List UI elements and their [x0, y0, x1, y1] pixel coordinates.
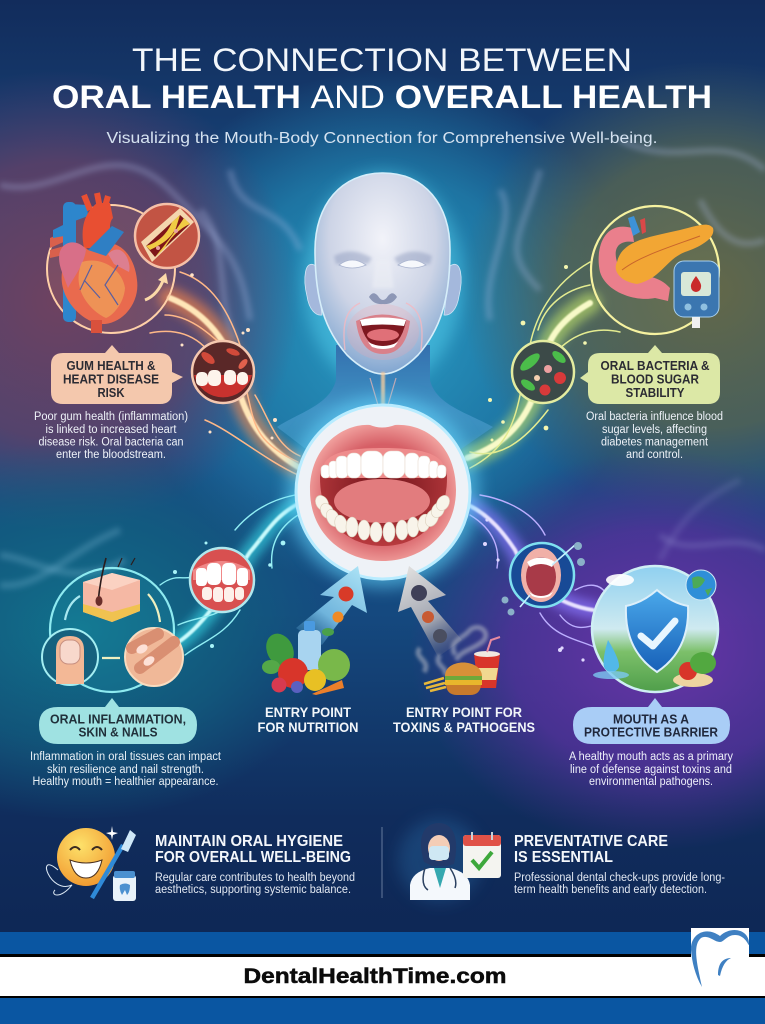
hygiene text: aesthetics, supporting systemic balance.	[155, 884, 351, 896]
tongue	[334, 479, 430, 523]
icon: globe	[686, 570, 716, 600]
nutrition label: FOR NUTRITION	[258, 720, 358, 735]
icon: food and water	[261, 621, 350, 695]
sugar description: diabetes management	[601, 436, 709, 448]
glowing energy streams	[150, 262, 620, 662]
panel: blood sugar	[512, 206, 723, 461]
sugar description: and control.	[626, 449, 683, 461]
nutrition label	[258, 705, 358, 735]
sugar bubble: STABILITY	[626, 386, 685, 400]
title	[52, 42, 712, 115]
central head figure	[277, 172, 493, 460]
preventative text: term health benefits and early detection.	[514, 884, 707, 896]
panel: heart disease	[34, 193, 254, 461]
panel: skin and nails	[30, 548, 254, 788]
hygiene text: MAINTAIN ORAL HYGIENE	[155, 833, 343, 850]
heart description: Poor gum health (inflammation)	[34, 411, 188, 423]
icon: tooth logo	[691, 928, 749, 987]
title: ORAL HEALTH AND OVERALL HEALTH	[52, 79, 712, 115]
icon: pancreas	[599, 216, 713, 301]
toxins label: ENTRY POINT FOR	[406, 705, 522, 720]
icon: heart	[50, 193, 168, 333]
icon: smoke	[418, 627, 486, 675]
footer band	[0, 928, 765, 1024]
sugar description	[586, 411, 723, 461]
icon: open mouth circle	[502, 542, 585, 616]
small mouth	[344, 303, 422, 360]
icon: glucose meter	[674, 261, 719, 328]
skin description: skin resilience and nail strength.	[47, 764, 204, 776]
ring	[50, 568, 174, 692]
heart description: enter the bloodstream.	[56, 449, 166, 461]
panel: nutrition entry point	[258, 566, 367, 735]
barrier description	[569, 751, 733, 788]
icon: bacteria circle	[512, 341, 574, 403]
sugar description: sugar levels, affecting	[602, 424, 707, 436]
panel: oral hygiene tip	[46, 826, 355, 901]
ring	[47, 205, 175, 333]
heart bubble: RISK	[98, 386, 124, 400]
title: THE CONNECTION BETWEEN	[132, 42, 632, 78]
gums and mouth interior	[320, 450, 447, 546]
skin bubble	[39, 698, 197, 744]
nutrition label: ENTRY POINT	[265, 705, 352, 720]
barrier bubble	[573, 698, 730, 744]
icon: dentist with calendar	[398, 818, 501, 902]
skin description	[30, 751, 222, 788]
panel: toxins entry point	[393, 566, 535, 735]
eyes	[334, 251, 432, 268]
icon: skin block	[83, 558, 140, 622]
panel: protective barrier	[502, 542, 733, 788]
arrow up	[398, 566, 462, 657]
shoulders and neck	[277, 345, 493, 460]
icon: smiling emoji with toothbrush	[46, 826, 136, 901]
lower teeth	[313, 493, 452, 542]
icon: blocked artery	[135, 204, 199, 268]
ears	[305, 264, 461, 315]
icon: burger and drink	[424, 637, 500, 695]
sugar bubble: ORAL BACTERIA &	[600, 359, 710, 373]
panel: preventative care tip	[398, 818, 725, 902]
heart description: is linked to increased heart	[46, 424, 177, 436]
arrows in cycle	[65, 594, 160, 658]
heart description	[34, 411, 188, 461]
sugar bubble: BLOOD SUGAR	[611, 372, 699, 386]
icon: gums with bacteria	[192, 341, 254, 403]
skin description: Inflammation in oral tissues can impact	[30, 751, 222, 763]
sugar description: Oral bacteria influence blood	[586, 411, 723, 423]
hygiene text	[155, 833, 355, 896]
upper teeth	[321, 451, 446, 478]
skin bubble: SKIN & NAILS	[78, 726, 158, 740]
toxins label: TOXINS & PATHOGENS	[393, 720, 535, 735]
icon: pathogens	[411, 585, 447, 643]
skin bubble: ORAL INFLAMMATION,	[50, 712, 186, 726]
website: DentalHealthTime.com	[244, 965, 506, 988]
icon: healthy gums	[190, 548, 254, 612]
hygiene text: FOR OVERALL WELL-BEING	[155, 849, 351, 866]
icon: floating food	[322, 586, 354, 636]
toxins label	[393, 705, 535, 735]
preventative text: Professional dental check-ups provide long-	[514, 872, 725, 884]
arrow up	[296, 566, 367, 645]
face	[315, 173, 450, 374]
hygiene text: Regular care contributes to health beyond	[155, 872, 355, 884]
heart bubble: GUM HEALTH &	[66, 359, 156, 373]
skin description: Healthy mouth = healthier appearance.	[32, 776, 218, 788]
icon: fingers circle	[125, 628, 183, 686]
barrier bubble: MOUTH AS A	[613, 712, 689, 726]
central large mouth	[287, 396, 479, 588]
barrier description: environmental pathogens.	[589, 776, 713, 788]
ring	[591, 206, 719, 334]
sugar bubble	[580, 345, 720, 404]
heart description: disease risk. Oral bacteria can	[38, 436, 184, 448]
icon: fingernail circle	[42, 629, 98, 685]
preventative text: PREVENTATIVE CARE	[514, 833, 668, 850]
barrier bubble: PROTECTIVE BARRIER	[584, 726, 718, 740]
heart bubble: HEART DISEASE	[63, 372, 159, 386]
barrier description: A healthy mouth acts as a primary	[569, 751, 733, 763]
nose	[369, 260, 397, 304]
lips	[310, 425, 456, 561]
icon: shield scene	[592, 566, 718, 692]
heart bubble	[51, 345, 183, 404]
barrier description: line of defense against toxins and	[570, 764, 732, 776]
subtitle: Visualizing the Mouth-Body Connection for Comprehensive Well-being.	[106, 130, 658, 147]
preventative text: IS ESSENTIAL	[514, 849, 613, 866]
preventative text	[514, 833, 725, 896]
